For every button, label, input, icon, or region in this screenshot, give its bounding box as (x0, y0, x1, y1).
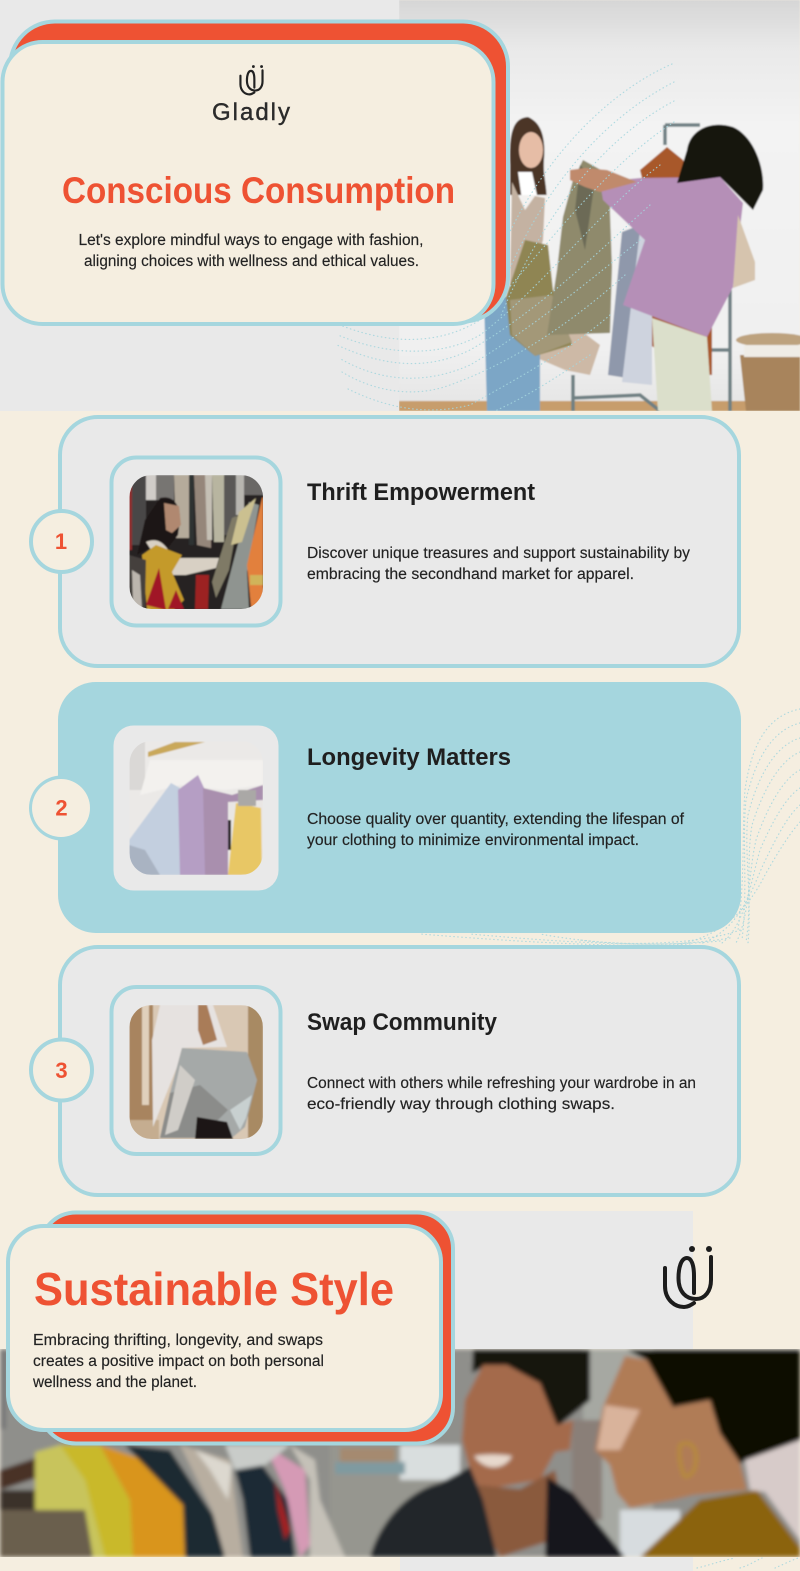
number badge 1 (31, 511, 92, 572)
image frame 1 (112, 458, 280, 626)
number badge 3: 3 (55, 1058, 68, 1083)
header card with orange backing (2, 22, 508, 324)
description 1: embracing the secondhand market for apparel. (307, 566, 634, 583)
description 1: Discover unique treasures and support sustainability by (307, 545, 690, 562)
panel: step 3 swap community (31, 947, 739, 1195)
photo: two smiling women in a clothing store (0, 1349, 800, 1557)
heading 2: Longevity Matters (307, 744, 511, 771)
description 1 (307, 545, 690, 583)
footer lower grey strip (400, 1557, 693, 1571)
number badge 3 (31, 1040, 92, 1100)
number badge 1: 1 (55, 529, 67, 554)
conclusion title: Sustainable Style (34, 1263, 394, 1315)
description 3: eco-friendly way through clothing swaps. (307, 1096, 615, 1113)
image frame 3 (112, 987, 280, 1154)
photo: two women choosing clothes on a rack (399, 0, 800, 411)
photo: person carrying clothes pile (129, 1005, 264, 1140)
number badge 2: 2 (55, 796, 68, 820)
header description: aligning choices with wellness and ethical values. (84, 253, 419, 270)
description 2: your clothing to minimize environmental impact. (307, 832, 639, 849)
main title: Conscious Consumption (62, 170, 455, 211)
orange backing panel (40, 1212, 453, 1444)
photo: woman browsing thrift rack (129, 475, 264, 610)
conclusion text: creates a positive impact on both personal (33, 1353, 324, 1370)
conclusion text: Embracing thrifting, longevity, and swaps (33, 1332, 323, 1349)
conclusion text: wellness and the planet. (32, 1374, 197, 1391)
description 3 (307, 1075, 696, 1113)
card 2 background (58, 682, 741, 933)
conclusion text (32, 1332, 324, 1391)
image frame 2 (114, 726, 278, 890)
photo: pastel clothes on hangers (129, 741, 264, 876)
orange backing panel (10, 22, 508, 322)
dotted wave decoration, bottom (697, 1558, 798, 1568)
card 1 background (60, 417, 739, 666)
logo mark (240, 65, 263, 94)
dotted wave decoration, right side (420, 709, 800, 945)
heading 3: Swap Community (307, 1009, 498, 1036)
cream conclusion card (8, 1226, 441, 1430)
description 2 (307, 811, 685, 849)
card 3 background (60, 947, 739, 1195)
brand name: Gladly (212, 99, 290, 126)
number badge 2 (29, 776, 94, 840)
description 2: Choose quality over quantity, extending the lifespan of (307, 811, 685, 828)
header grey panel (0, 0, 400, 411)
heading 1: Thrift Empowerment (307, 479, 535, 506)
cream title card (2, 42, 494, 324)
header description (78, 232, 424, 270)
dotted wave decoration, header (337, 64, 674, 411)
icon: large logo mark (665, 1246, 712, 1307)
footer grey block (400, 1211, 693, 1349)
description 3: Connect with others while refreshing your wardrobe in an (307, 1075, 696, 1092)
header description: Let's explore mindful ways to engage with fashion, (78, 232, 424, 249)
panel: step 1 thrift empowerment (31, 417, 739, 666)
footer card with orange backing (8, 1212, 453, 1444)
panel: step 2 longevity matters (29, 682, 741, 933)
